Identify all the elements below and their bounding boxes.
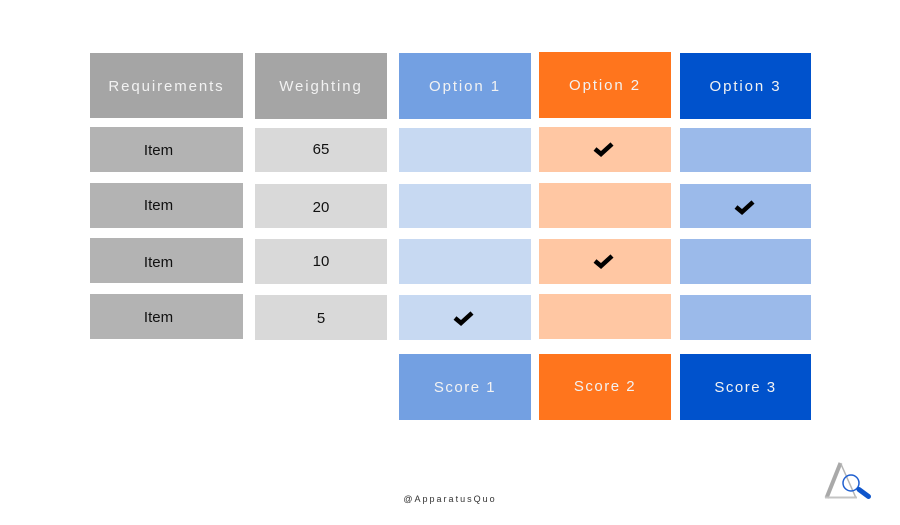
weight: 20: 20 (313, 199, 329, 216)
row label: item 1: Item (144, 142, 173, 159)
cell: row 4 (539, 294, 671, 339)
cell: row 1 (399, 128, 531, 172)
header: Requirements (90, 53, 243, 118)
cell: row 2 (539, 183, 671, 228)
header: Option 2: Option 2 (569, 77, 641, 94)
column: requirements (90, 53, 243, 339)
score: Score 1 (399, 354, 531, 420)
cell: row 4 with check (399, 295, 531, 340)
header: Option 1 (399, 53, 531, 119)
icon: logo triangle with magnifier (824, 462, 871, 499)
score: Score 2: Score 2 (574, 378, 636, 395)
weight: 65: 65 (313, 141, 329, 158)
column: weighting (255, 53, 387, 340)
weight: 10 (255, 239, 387, 284)
row label: item 1 (90, 127, 243, 172)
column: option 3 (680, 53, 811, 420)
header: Weighting (255, 53, 387, 119)
weight: 5 (255, 295, 387, 340)
header: Weighting: Weighting (279, 78, 363, 95)
score: Score 1: Score 1 (434, 379, 496, 396)
row label: item 3 (90, 238, 243, 283)
header: Option 3: Option 3 (710, 78, 781, 95)
cell: row 3 with check (539, 239, 671, 284)
cell: row 2 with check (680, 184, 811, 228)
header: Option 1: Option 1 (429, 78, 501, 95)
weight: 5: 5 (317, 310, 325, 327)
header: Option 3 (680, 53, 811, 119)
cell: row 3 (680, 239, 811, 284)
weight: 65 (255, 128, 387, 172)
weight: 20 (255, 184, 387, 228)
footer handle: @ApparatusQuo (403, 494, 497, 504)
header: Option 2 (539, 52, 671, 118)
row label: item 2 (90, 183, 243, 228)
cell: row 3 (399, 239, 531, 284)
score: Score 2 (539, 354, 671, 420)
header: Requirements: Requirements (108, 78, 225, 95)
cell: row 2 (399, 184, 531, 228)
column: option 1 (399, 53, 531, 420)
cell: row 4 (680, 295, 811, 340)
row label: item 3: Item (144, 254, 173, 271)
column: option 2 (539, 52, 671, 420)
weight: 10: 10 (313, 253, 329, 270)
score: Score 3: Score 3 (714, 379, 777, 396)
cell: row 1 (680, 128, 811, 172)
row label: item 4: Item (144, 309, 173, 326)
row label: item 4 (90, 294, 243, 339)
cell: row 1 with check (539, 127, 671, 172)
row label: item 2: Item (144, 197, 173, 214)
score: Score 3 (680, 354, 811, 420)
